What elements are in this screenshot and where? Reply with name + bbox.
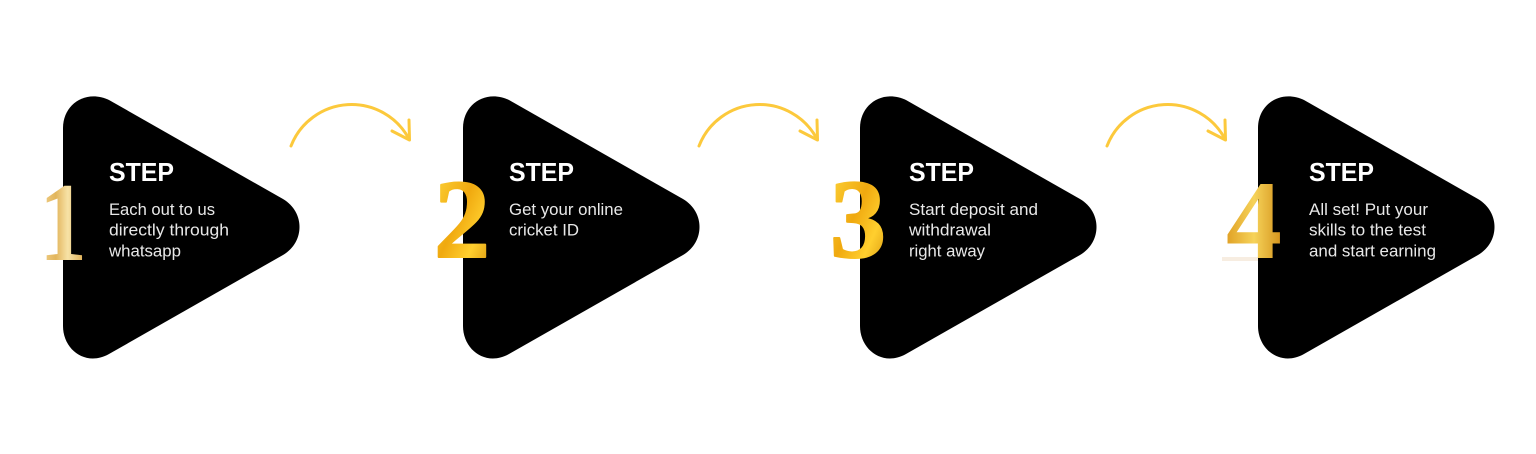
step 3 gold number: 3 xyxy=(830,158,886,282)
step 2 xyxy=(434,96,700,358)
step 1 xyxy=(39,96,300,358)
step 3 triangle panel xyxy=(860,96,1096,358)
step 4 description: All set! Put your xyxy=(1309,201,1429,219)
step 3 description: withdrawal xyxy=(908,222,991,240)
step 2 gold number: 2 xyxy=(434,158,490,282)
step 1 description xyxy=(108,201,229,260)
step 1 description: Each out to us xyxy=(109,201,215,219)
step 3 xyxy=(830,96,1096,358)
step 2 heading: STEP xyxy=(509,159,574,187)
step 1 gold number: 1 xyxy=(39,161,87,285)
step 2 description: Get your online xyxy=(509,201,623,219)
step 1 triangle panel xyxy=(63,96,300,358)
step 2 description xyxy=(509,201,623,240)
arrow 3 xyxy=(1107,105,1226,146)
step 4 description: skills to the test xyxy=(1309,222,1426,240)
step 1 heading: STEP xyxy=(109,159,174,187)
step 4 xyxy=(1222,96,1494,358)
step 3 description: right away xyxy=(909,242,986,260)
step 3 description: Start deposit and xyxy=(909,201,1038,219)
step 2 triangle panel xyxy=(463,96,700,358)
step 4 gold number: 4 xyxy=(1226,159,1282,283)
step 4 heading: STEP xyxy=(1309,159,1374,187)
arrow 2 xyxy=(699,105,818,146)
step 4 description xyxy=(1309,201,1436,260)
step 3 description xyxy=(908,201,1038,260)
step 4 description: and start earning xyxy=(1309,242,1436,260)
arrow 1 xyxy=(291,105,410,146)
step 1 description: directly through xyxy=(109,222,229,240)
step 2 description: cricket ID xyxy=(509,222,579,240)
step 3 heading: STEP xyxy=(909,159,974,187)
step 1 description: whatsapp xyxy=(108,242,181,260)
shadow under number 4 xyxy=(1222,257,1258,261)
step 4 triangle panel xyxy=(1258,96,1494,358)
